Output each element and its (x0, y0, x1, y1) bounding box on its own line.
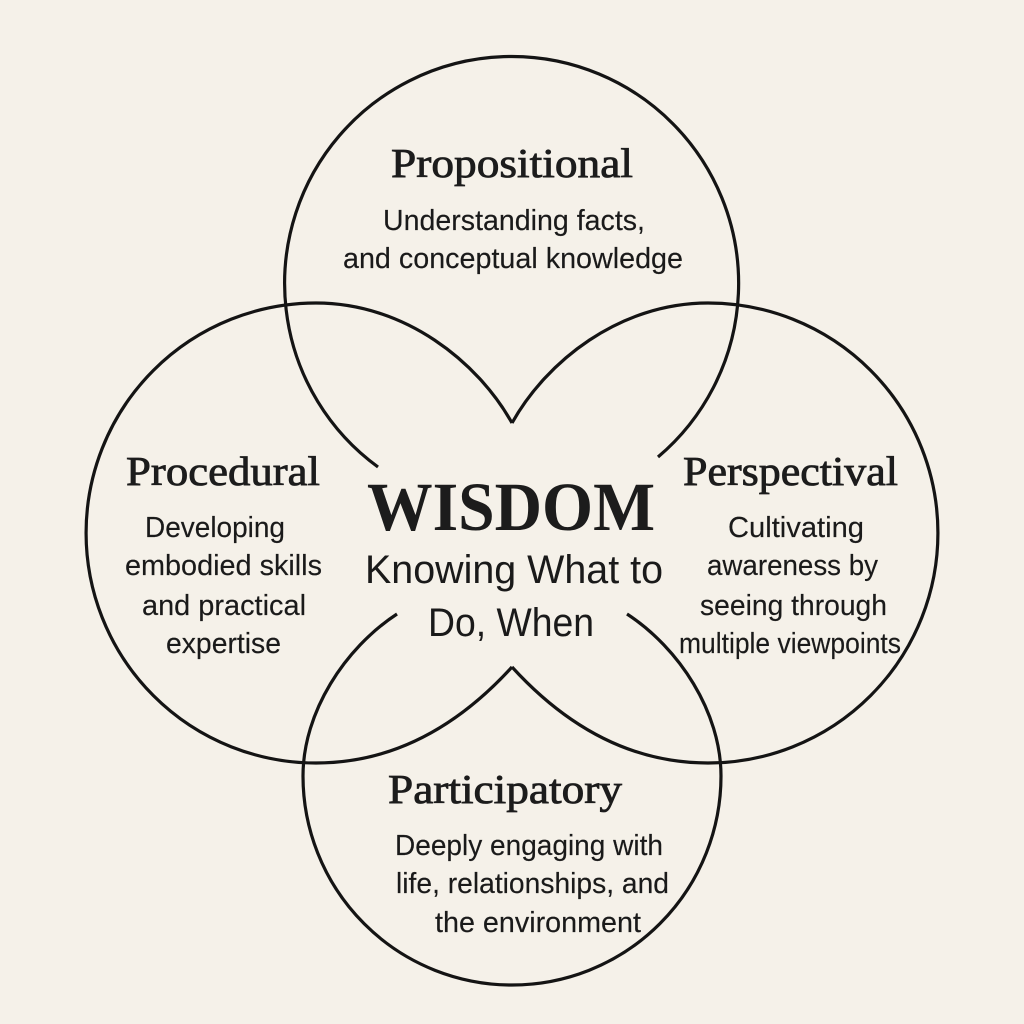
subtitle: knowing what to do, when: Knowing What to (365, 548, 663, 592)
text block: participatory description: Deeply engaging with (395, 830, 663, 862)
heading: perspectival: Perspectival (683, 448, 898, 494)
heading: propositional: Propositional (391, 140, 633, 186)
subtitle: knowing what to do, when: Do, When (428, 601, 594, 645)
subtitle: knowing what to do, when (365, 548, 663, 645)
text block: procedural description: and practical (142, 590, 306, 622)
text block: perspectival description (679, 512, 901, 660)
center: wisdom (365, 469, 663, 645)
text block: procedural description: Developing (145, 512, 285, 544)
heading: participatory: Participatory (388, 766, 623, 812)
panel: propositional (343, 140, 683, 275)
text block: perspectival description: multiple viewpoints (679, 628, 901, 660)
text block: procedural description: embodied skills (125, 550, 322, 582)
text block: procedural description (125, 512, 322, 660)
text block: propositional description: and conceptual knowledge (343, 243, 683, 275)
text block: perspectival description: awareness by (707, 550, 879, 582)
panel: participatory (388, 766, 669, 939)
heading: procedural: Procedural (126, 448, 320, 494)
panel: procedural (125, 448, 322, 660)
text block: perspectival description: seeing through (700, 590, 887, 622)
circle outline: perspectival (right) (512, 303, 938, 763)
title: wisdom: WISDOM (367, 469, 655, 545)
circle outline: propositional (top) (285, 56, 739, 467)
text block: participatory description (395, 830, 669, 939)
text block: propositional description (343, 205, 683, 275)
circle outline: participatory (bottom) (303, 614, 721, 985)
text block: procedural description: expertise (166, 628, 281, 660)
text block: participatory description: life, relationships, and (396, 868, 669, 900)
text block: participatory description: the environment (435, 907, 641, 939)
text block: propositional description: Understanding facts, (383, 205, 645, 237)
circle outline: procedural (left) (86, 303, 512, 763)
panel: perspectival (679, 448, 901, 660)
text block: perspectival description: Cultivating (728, 512, 864, 544)
